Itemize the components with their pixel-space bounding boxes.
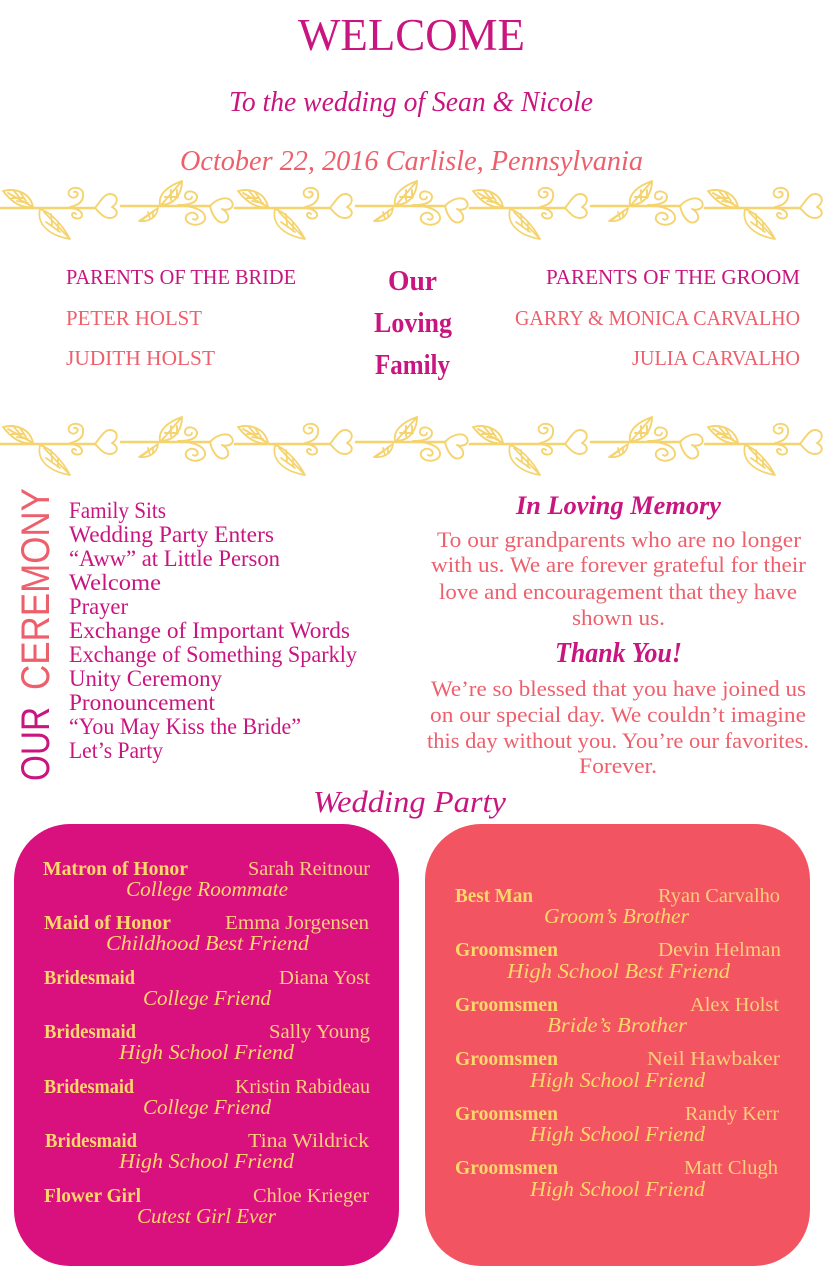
ceremony order list bbox=[69, 498, 357, 763]
ceremony order list: “You May Kiss the Bride” bbox=[69, 714, 301, 739]
title: WELCOME bbox=[298, 10, 525, 60]
memory paragraph: shown us. bbox=[572, 605, 665, 630]
parents of the groom bbox=[515, 265, 800, 370]
bridesmaid 1 bbox=[44, 967, 370, 1010]
our loving family heading bbox=[374, 266, 452, 381]
ceremony order list: Unity Ceremony bbox=[69, 666, 222, 691]
parents of the groom: PARENTS OF THE GROOM bbox=[546, 265, 800, 289]
matron of honor: Matron of Honor bbox=[43, 858, 188, 880]
memory paragraph: love and encouragement that they have bbox=[439, 579, 797, 604]
groomsman 2: Bride’s Brother bbox=[547, 1013, 688, 1037]
thank you heading: Thank You! bbox=[555, 637, 682, 669]
our ceremony vertical heading: CEREMONY bbox=[14, 488, 58, 690]
our loving family heading: Family bbox=[375, 350, 450, 381]
maid of honor: Maid of Honor bbox=[44, 912, 171, 934]
best man: Groom’s Brother bbox=[544, 904, 690, 928]
ceremony order list: “Aww” at Little Person bbox=[69, 546, 280, 571]
flower girl: Flower Girl bbox=[44, 1185, 141, 1207]
parents of the groom: JULIA CARVALHO bbox=[632, 346, 800, 370]
maid of honor bbox=[44, 912, 369, 955]
groomsman 1: Groomsmen bbox=[455, 939, 558, 961]
our loving family heading: Our bbox=[388, 266, 437, 297]
matron of honor bbox=[43, 858, 370, 901]
ceremony order list: Prayer bbox=[69, 594, 128, 619]
subtitle: To the wedding of Sean & Nicole bbox=[229, 86, 593, 118]
bridesmaid 2: High School Friend bbox=[118, 1040, 295, 1064]
parents of the bride: PARENTS OF THE BRIDE bbox=[66, 265, 296, 289]
groomsman 1: Devin Helman bbox=[658, 939, 781, 961]
thank you paragraph: on our special day. We couldn’t imagine bbox=[430, 702, 806, 727]
groomsman 2: Alex Holst bbox=[690, 994, 779, 1016]
flower girl: Chloe Krieger bbox=[253, 1185, 369, 1207]
ceremony order list: Exchange of Something Sparkly bbox=[69, 642, 357, 667]
bridesmaid 1: Diana Yost bbox=[279, 967, 370, 989]
bridesmaid 3: Kristin Rabideau bbox=[235, 1076, 370, 1098]
bridesmaid 1: College Friend bbox=[143, 986, 271, 1010]
matron of honor: College Roommate bbox=[126, 877, 288, 901]
parents of the bride: JUDITH HOLST bbox=[66, 346, 215, 370]
our ceremony vertical heading bbox=[14, 488, 58, 781]
vine divider middle bbox=[0, 417, 825, 475]
bridesmaid 4: Tina Wildrick bbox=[248, 1130, 369, 1152]
groomsman 5: Matt Clugh bbox=[684, 1157, 778, 1179]
groomsman 3 bbox=[455, 1048, 780, 1092]
groomsman 5: Groomsmen bbox=[455, 1157, 558, 1179]
best man bbox=[455, 885, 780, 928]
ceremony order list: Pronouncement bbox=[69, 690, 216, 715]
groomsman 3: Neil Hawbaker bbox=[647, 1048, 780, 1070]
ceremony order list: Let’s Party bbox=[69, 738, 163, 763]
ceremony order list: Wedding Party Enters bbox=[69, 522, 274, 547]
groomsman 4: Groomsmen bbox=[455, 1103, 558, 1125]
bridesmaid 4: Bridesmaid bbox=[45, 1130, 137, 1152]
our ceremony vertical heading: OUR bbox=[14, 707, 58, 781]
flower girl bbox=[44, 1185, 369, 1228]
groomsman 5: High School Friend bbox=[529, 1177, 706, 1201]
maid of honor: Childhood Best Friend bbox=[106, 931, 310, 955]
our loving family heading: Loving bbox=[374, 308, 452, 339]
bridesmaid 3: College Friend bbox=[143, 1095, 271, 1119]
maid of honor: Emma Jorgensen bbox=[225, 912, 369, 934]
date and location: October 22, 2016 Carlisle, Pennsylvania bbox=[180, 146, 643, 177]
bridesmaid 1: Bridesmaid bbox=[44, 967, 135, 989]
thank you paragraph bbox=[427, 676, 809, 778]
groomsman 4: High School Friend bbox=[529, 1122, 706, 1146]
bridesmaid 4 bbox=[45, 1130, 369, 1173]
in loving memory heading: In Loving Memory bbox=[515, 491, 721, 520]
groomsman 4: Randy Kerr bbox=[685, 1103, 779, 1125]
ceremony order list: Welcome bbox=[69, 570, 161, 595]
bridesmaid 2 bbox=[44, 1021, 370, 1064]
bridesmaid 3 bbox=[44, 1076, 370, 1119]
best man: Best Man bbox=[455, 885, 533, 907]
ceremony order list: Exchange of Important Words bbox=[69, 618, 350, 643]
thank you paragraph: this day without you. You’re our favorites. bbox=[427, 728, 809, 753]
memory paragraph: with us. We are forever grateful for their bbox=[431, 552, 807, 577]
ceremony order list: Family Sits bbox=[69, 498, 166, 523]
groomsman 1 bbox=[455, 939, 781, 983]
memory paragraph bbox=[431, 527, 807, 630]
parents of the bride: PETER HOLST bbox=[66, 306, 202, 330]
parents of the bride bbox=[66, 265, 296, 370]
groomsman 2: Groomsmen bbox=[455, 994, 558, 1016]
bridesmaid 2: Bridesmaid bbox=[44, 1021, 136, 1043]
wedding party heading: Wedding Party bbox=[313, 784, 506, 819]
memory paragraph: To our grandparents who are no longer bbox=[437, 527, 802, 552]
bridesmaid 3: Bridesmaid bbox=[44, 1076, 134, 1098]
groomsman 3: High School Friend bbox=[529, 1068, 706, 1092]
vine divider top bbox=[0, 181, 825, 239]
matron of honor: Sarah Reitnour bbox=[248, 858, 370, 880]
bridesmaid 2: Sally Young bbox=[269, 1021, 370, 1043]
groomsman 3: Groomsmen bbox=[455, 1048, 558, 1070]
groomsman 5 bbox=[455, 1157, 778, 1201]
groomsman 4 bbox=[455, 1103, 779, 1146]
groomsman 2 bbox=[455, 994, 779, 1037]
panel: groom's party bbox=[425, 824, 810, 1266]
panel: bridal party bbox=[14, 824, 399, 1266]
thank you paragraph: We’re so blessed that you have joined us bbox=[431, 676, 806, 701]
bridesmaid 4: High School Friend bbox=[118, 1149, 295, 1173]
flower girl: Cutest Girl Ever bbox=[137, 1204, 277, 1228]
best man: Ryan Carvalho bbox=[658, 885, 780, 907]
groomsman 1: High School Best Friend bbox=[506, 959, 731, 983]
thank you paragraph: Forever. bbox=[579, 753, 657, 778]
parents of the groom: GARRY & MONICA CARVALHO bbox=[515, 306, 800, 330]
